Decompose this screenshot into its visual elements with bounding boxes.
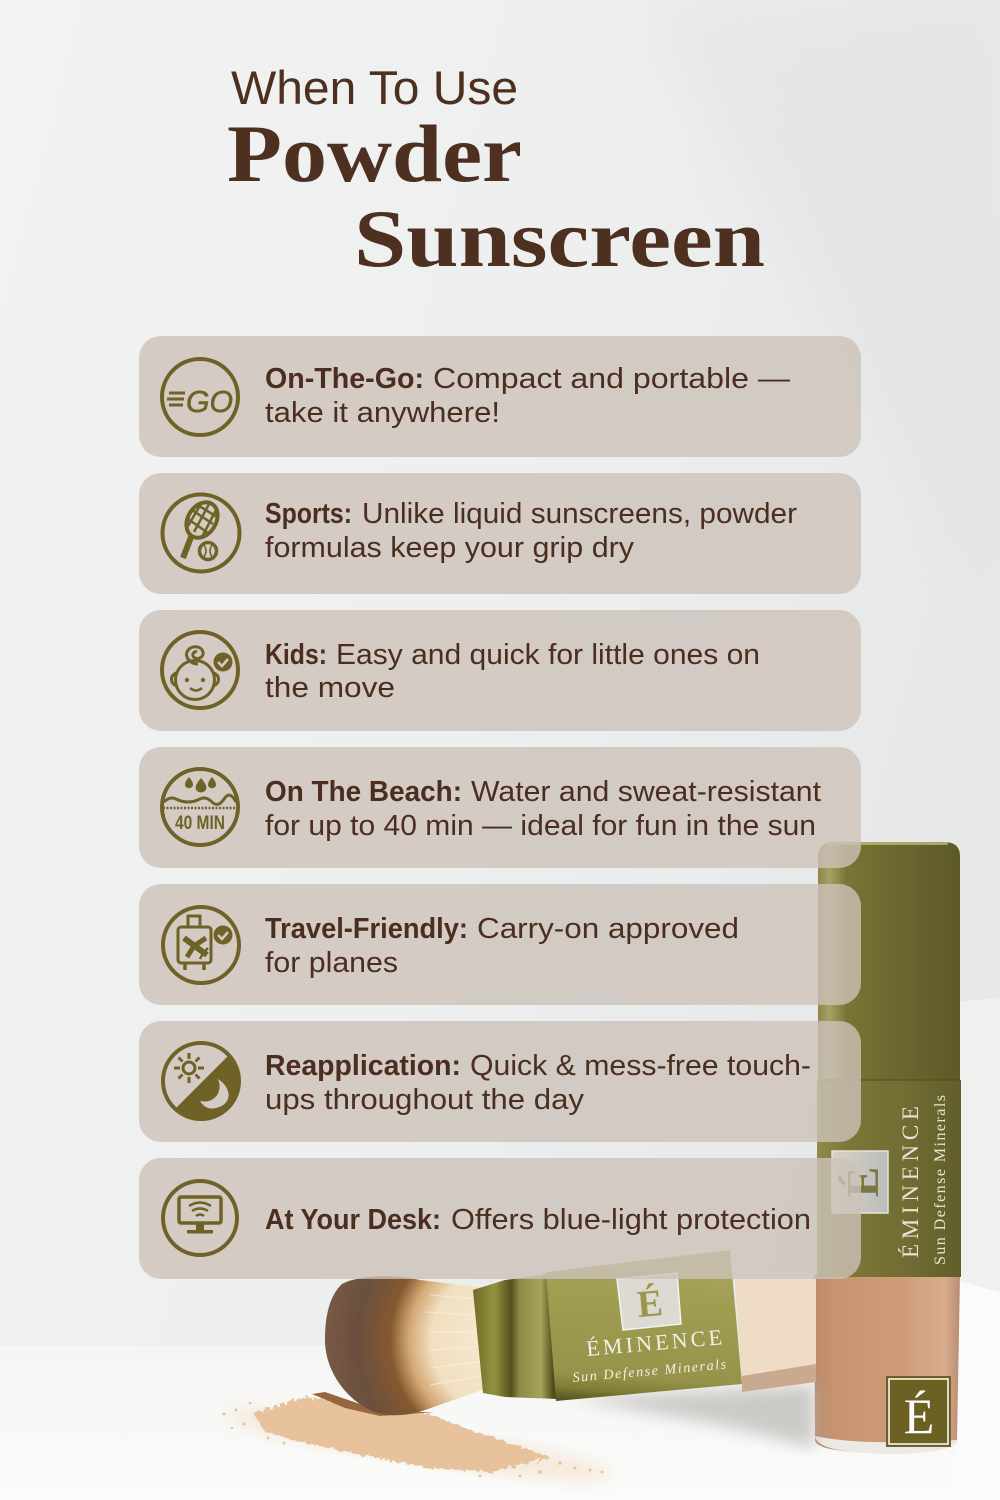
text: Reapplication bbox=[265, 1050, 811, 1116]
text: On-The-Go: Compact and portable — bbox=[433, 363, 790, 395]
text: Travel-Friendly: for planes bbox=[265, 947, 398, 979]
text: On-The-Go: On-The-Go: bbox=[265, 363, 424, 395]
text: Sports: Sports: bbox=[265, 498, 352, 530]
text: On The Beach: for up to 40 min — ideal for fun in the sun bbox=[265, 810, 816, 842]
text: Sports: Unlike liquid sunscreens, powder bbox=[362, 498, 797, 530]
panel: Travel-Friendly bbox=[139, 884, 861, 1005]
brush bristles bbox=[325, 1276, 496, 1415]
powder dark ridge bbox=[312, 1392, 435, 1416]
brand logo badge bbox=[886, 1376, 951, 1447]
bottle cap bbox=[818, 842, 960, 1080]
clear tube bbox=[735, 1279, 816, 1388]
panel: On-The-Go bbox=[139, 336, 861, 457]
icon: monitor bbox=[163, 1181, 237, 1255]
brush logo bbox=[617, 1273, 681, 1330]
text: Kids: Kids: bbox=[265, 639, 327, 671]
powder pile bbox=[253, 1397, 550, 1472]
icon: go: GO bbox=[186, 384, 233, 419]
text: Reapplication: Reapplication: bbox=[265, 1050, 461, 1082]
text: Travel-Friendly: Carry-on approved bbox=[477, 913, 739, 945]
powder dots bbox=[222, 1402, 604, 1478]
bottle brand text: ÉMINENCE bbox=[898, 1106, 923, 1258]
text: Sports bbox=[265, 498, 797, 564]
text: Kids: the move bbox=[265, 672, 395, 704]
product: lying brush bbox=[222, 1250, 816, 1493]
rotated brand square bbox=[832, 1151, 888, 1213]
panel: At Your Desk bbox=[139, 1158, 861, 1279]
icon: go bbox=[162, 359, 238, 435]
text: Travel-Friendly bbox=[265, 913, 739, 979]
bottle jar bbox=[814, 1275, 960, 1453]
icon: water resistant 40 min bbox=[162, 769, 238, 845]
icon: luggage with plane bbox=[163, 907, 239, 983]
text: Kids: Easy and quick for little ones on bbox=[336, 639, 760, 671]
panel: On The Beach bbox=[139, 747, 861, 868]
text: On-The-Go: take it anywhere! bbox=[265, 397, 500, 429]
brand logo badge: É bbox=[904, 1388, 934, 1444]
white block behind bottle bbox=[955, 998, 1000, 1500]
product: upright bottle bbox=[814, 842, 961, 1454]
bottle product name: Sun Defense Minerals bbox=[932, 1095, 949, 1265]
panel: Kids bbox=[139, 610, 861, 731]
brush product name: Sun Defense Minerals bbox=[572, 1358, 727, 1386]
jar glass base bbox=[815, 1436, 957, 1454]
brush shadow bbox=[570, 1385, 815, 1448]
text: Reapplication: Quick & mess-free touch- bbox=[470, 1050, 811, 1082]
title line: When To Use: When To Use bbox=[231, 61, 518, 114]
text: Travel-Friendly: Travel-Friendly: bbox=[265, 913, 468, 945]
icon: baby face bbox=[162, 632, 238, 708]
text: Sports: formulas keep your grip dry bbox=[265, 532, 635, 564]
title bbox=[227, 61, 765, 284]
text: Kids bbox=[265, 639, 760, 704]
panel: Reapplication bbox=[139, 1021, 861, 1142]
text: On-The-Go bbox=[265, 363, 790, 429]
brush logo: É bbox=[635, 1282, 664, 1326]
text: On The Beach: Water and sweat-resistant bbox=[471, 776, 821, 808]
title line: Powder: Powder bbox=[227, 108, 522, 199]
text: At Your Desk: Offers blue-light protection bbox=[451, 1204, 811, 1236]
title line: Sunscreen: Sunscreen bbox=[354, 193, 765, 284]
wall shadow bbox=[640, 0, 1000, 620]
text: On The Beach bbox=[265, 776, 821, 842]
text: At Your Desk bbox=[265, 1204, 811, 1236]
text: Reapplication: ups throughout the day bbox=[265, 1084, 585, 1116]
icon: water resistant 40 min: 40 MIN bbox=[175, 813, 225, 834]
floor bbox=[0, 1346, 1000, 1500]
rotated brand square: É bbox=[837, 1167, 888, 1197]
powder scatter bbox=[225, 1397, 615, 1493]
brush gold sleeve bbox=[546, 1250, 742, 1401]
bottle collar bbox=[817, 1080, 961, 1277]
icon: sun and moon bbox=[163, 1043, 240, 1120]
text: On The Beach: On The Beach: bbox=[265, 776, 462, 808]
icon: tennis racket bbox=[162, 494, 240, 572]
text: At Your Desk: At Your Desk: bbox=[265, 1204, 441, 1236]
brush brand text: ÉMINENCE bbox=[585, 1324, 723, 1361]
panel: Sports bbox=[139, 473, 861, 594]
brush neck bbox=[473, 1274, 558, 1399]
bristle strands bbox=[425, 1295, 494, 1385]
